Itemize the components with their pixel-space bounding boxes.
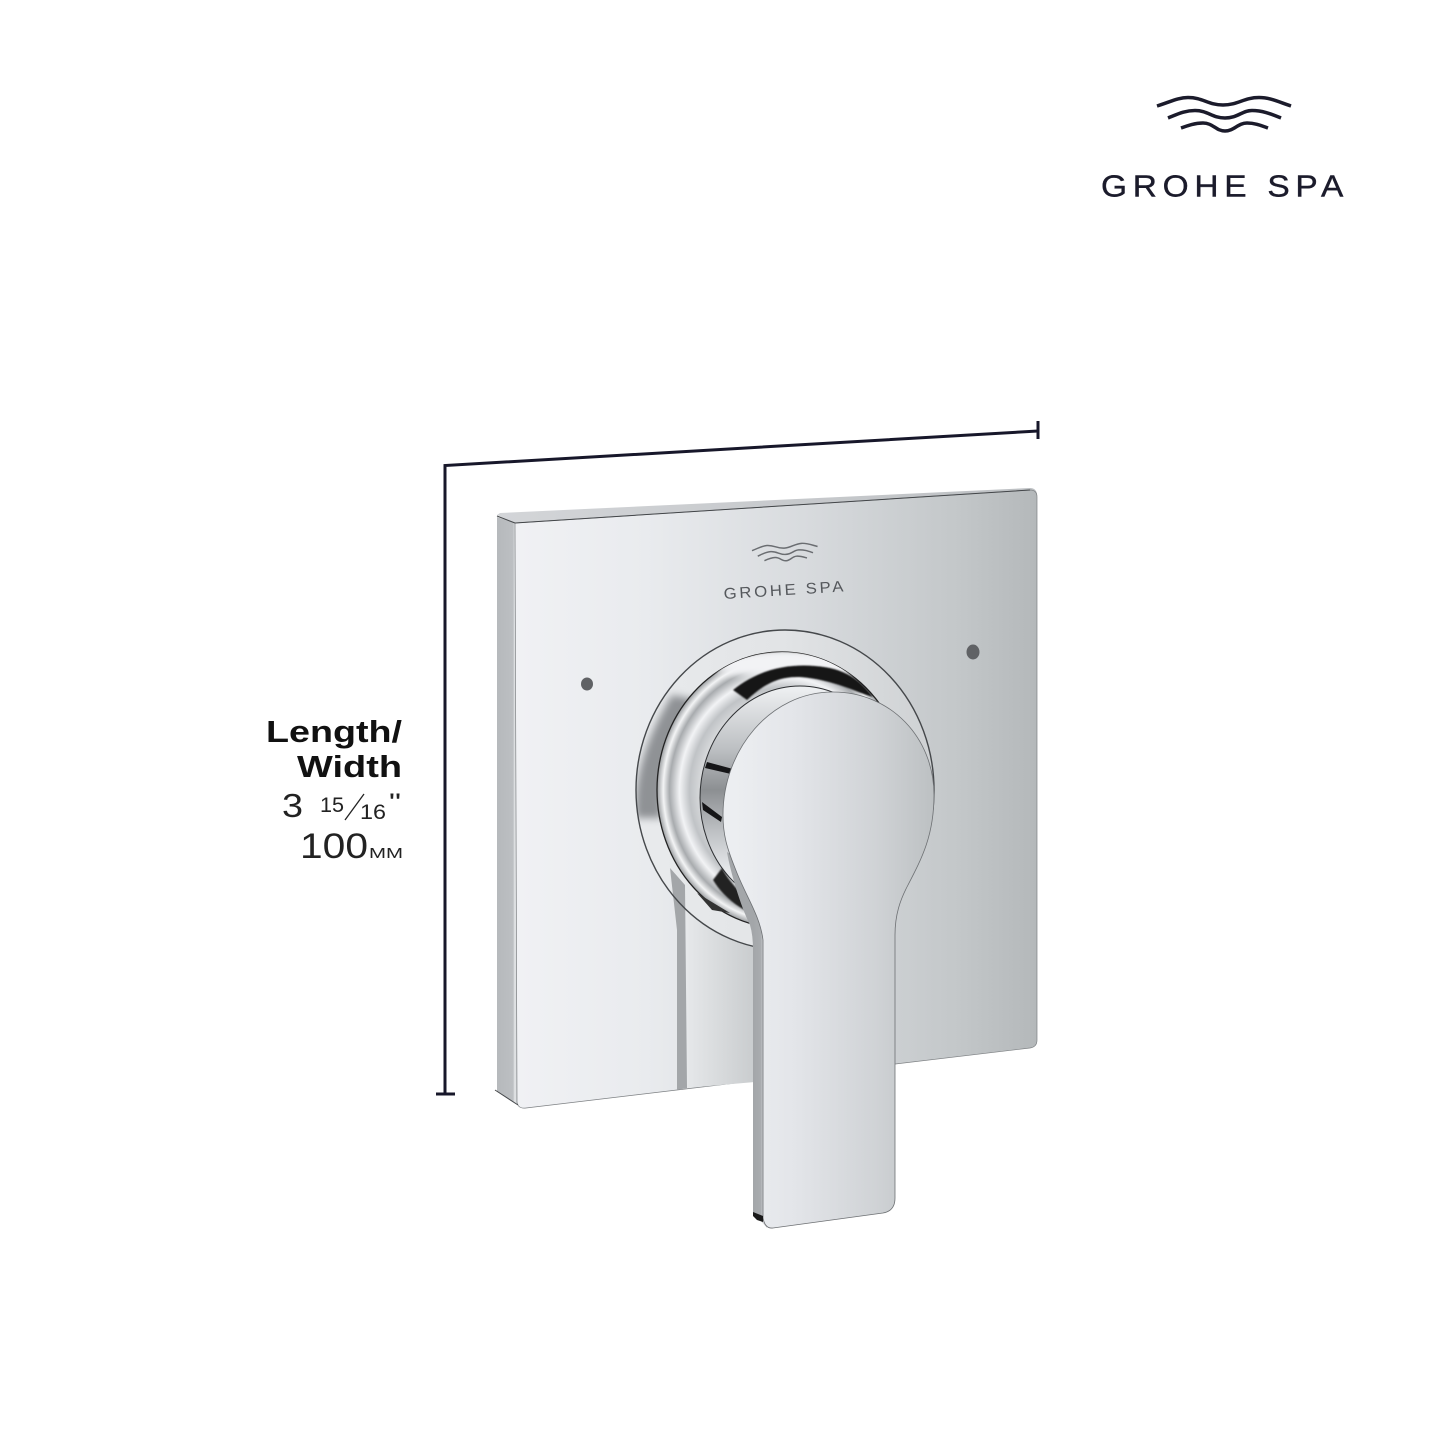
handle face (723, 692, 934, 1228)
imperial measurement: 15 (320, 794, 344, 817)
dark reflection left lower (702, 802, 722, 822)
handle side edge (727, 852, 770, 1228)
logo wordmark: GROHE SPA (1101, 169, 1349, 203)
imperial measurement: " (389, 789, 401, 816)
plate logo (723, 542, 847, 603)
imperial measurement: 16 (360, 801, 386, 824)
plate top edge (497, 488, 1037, 523)
dimension bracket (436, 421, 1038, 1094)
dark reflection bottom (713, 868, 748, 912)
product: shower valve trim (495, 488, 1037, 1228)
icon: waves (1157, 98, 1291, 131)
flange shading (636, 695, 698, 818)
ring flange (636, 630, 934, 950)
label heading: Width (297, 749, 402, 784)
screw right (966, 644, 980, 660)
plate left side (497, 517, 518, 1105)
ring body (657, 652, 907, 928)
metric measurement: MM (369, 845, 403, 862)
metric measurement: 100 (300, 827, 368, 866)
plate dark edges (495, 490, 1030, 1105)
ring top highlight (712, 652, 856, 679)
imperial measurement (282, 787, 401, 824)
inner neck (700, 686, 900, 910)
screw left (581, 678, 593, 690)
plate front face (515, 490, 1037, 1108)
plate panel below ring (686, 900, 755, 1088)
logo: GROHE SPA (1101, 98, 1349, 203)
label heading (266, 714, 402, 784)
handle end slot (753, 1212, 763, 1222)
dark reflection top (733, 666, 873, 700)
plate slot (670, 868, 687, 1090)
label heading: Length/ (266, 714, 402, 749)
metric measurement (300, 827, 403, 866)
plate logo: GROHE SPA (723, 578, 847, 603)
flange outline (636, 630, 934, 950)
imperial measurement: 3 (282, 787, 303, 824)
dark reflection left upper (705, 762, 733, 774)
dimension label: length/width (266, 714, 403, 866)
dark reflection bottom thin (697, 893, 730, 913)
